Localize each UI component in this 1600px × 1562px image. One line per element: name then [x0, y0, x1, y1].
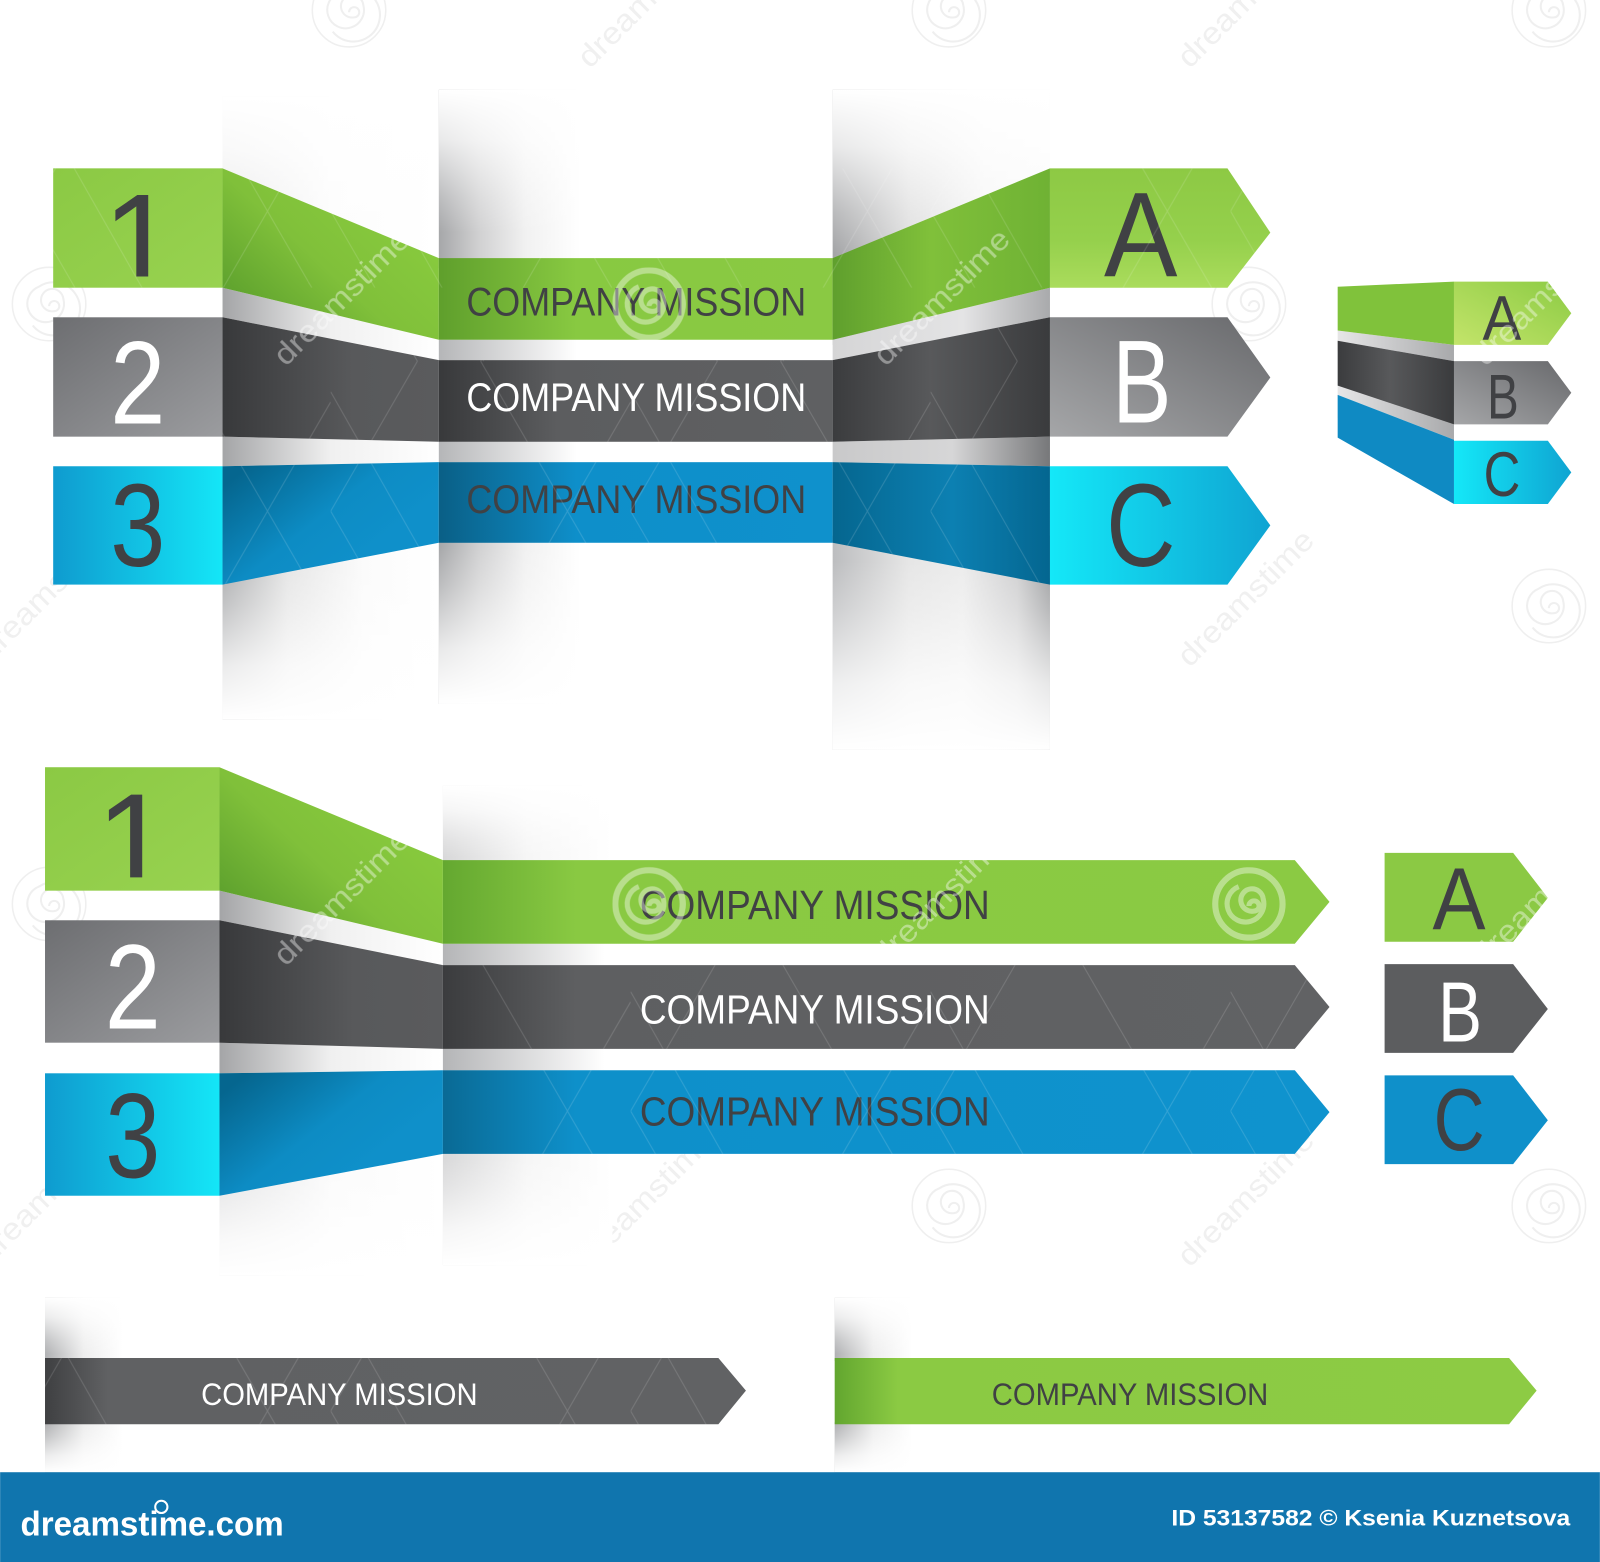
- watermark overlay: spirals and wordmarks on ribbons: dreamstime: [867, 822, 1017, 972]
- number 1: 1: [96, 765, 172, 918]
- small blue segment: [1338, 395, 1571, 504]
- number 2: 2: [110, 317, 165, 449]
- label: green mission: COMPANY MISSION: [640, 882, 990, 928]
- letter B: B: [1112, 316, 1171, 448]
- number 2: 2: [105, 919, 161, 1054]
- arrow A: [1385, 850, 1548, 948]
- label: grey mission: COMPANY MISSION: [466, 376, 806, 420]
- panel: second ribbon diagram: [45, 765, 1330, 1203]
- panel: green bottom arrow: COMPANY MISSION: [992, 1376, 1268, 1412]
- footer logo: dreamstime.com: [21, 1505, 284, 1543]
- number 3: 3: [110, 460, 165, 592]
- row 3: blue ribbon: [53, 462, 1270, 585]
- shadows: top ribbon folds: [223, 90, 1050, 750]
- label: grey mission: COMPANY MISSION: [640, 986, 990, 1032]
- fold gaps between ribbons: [223, 288, 1050, 466]
- number 1: 1: [102, 166, 177, 317]
- footer bar: [0, 1472, 1600, 1562]
- watermark: spirals and wordmarks: dreamstime: [1171, 1123, 1321, 1273]
- row 2: grey ribbon: [53, 317, 1270, 442]
- panel: grey bottom arrow: COMPANY MISSION: [201, 1376, 478, 1412]
- label: green mission: COMPANY MISSION: [466, 280, 806, 324]
- panel: grey bottom arrow: [45, 1358, 746, 1424]
- small letter B: B: [1487, 362, 1519, 432]
- watermark overlay: spirals and wordmarks on ribbons: [267, 222, 1600, 972]
- panel: small flat ABC arrows: [1385, 850, 1548, 1169]
- small green segment: [1338, 282, 1571, 345]
- watermark overlay: lattice lines on ribbons: [45, 168, 1312, 1424]
- watermark overlay: spirals and wordmarks on ribbons: dreamstime: [267, 222, 417, 372]
- letter C: C: [1106, 460, 1175, 592]
- row 1: green ribbon: [53, 168, 1270, 340]
- small letter C: C: [1484, 440, 1520, 510]
- small letter A: A: [1483, 284, 1522, 354]
- fold gaps: [219, 891, 1020, 1073]
- row 2: grey long arrow: [45, 920, 1330, 1049]
- watermark overlay: spirals and wordmarks on ribbons: dreamstime: [867, 222, 1017, 372]
- panel: top ribbon diagram: [53, 166, 1270, 592]
- row 1: green long arrow: [45, 767, 1330, 944]
- watermark overlay: spirals and wordmarks on ribbons: dreamstime: [1467, 222, 1600, 372]
- row 3: blue long arrow: [45, 1070, 1330, 1196]
- arrow B: [1385, 964, 1548, 1061]
- label: blue mission: COMPANY MISSION: [640, 1088, 990, 1134]
- arrow C: [1385, 1071, 1548, 1169]
- shadows: bottom ribbons: [45, 1298, 912, 1472]
- small grey segment: [1338, 341, 1571, 424]
- arrow A: A: [1433, 850, 1486, 948]
- panel: small 3D ABC block: [1338, 282, 1571, 510]
- watermark: spirals and wordmarks: dreamstime: [1171, 523, 1321, 673]
- arrow B: B: [1438, 965, 1482, 1061]
- footer credit: ID 53137582 © Ksenia Kuznetsova: [1171, 1505, 1571, 1530]
- watermark: spirals and wordmarks: dreamstime: [571, 1123, 721, 1273]
- watermark overlay: spirals and wordmarks on ribbons: dreamstime: [1467, 822, 1600, 972]
- number 3: 3: [105, 1068, 160, 1203]
- shadows: second ribbon folds: [219, 786, 612, 1275]
- watermark: spirals and wordmarks: dreamstime: [571, 523, 721, 673]
- watermark overlay: spirals and wordmarks on ribbons: dreamstime: [267, 822, 417, 972]
- letter A: A: [1104, 167, 1178, 302]
- arrow C: C: [1434, 1071, 1485, 1169]
- label: blue mission: COMPANY MISSION: [466, 478, 806, 522]
- panel: green bottom arrow: [835, 1358, 1537, 1424]
